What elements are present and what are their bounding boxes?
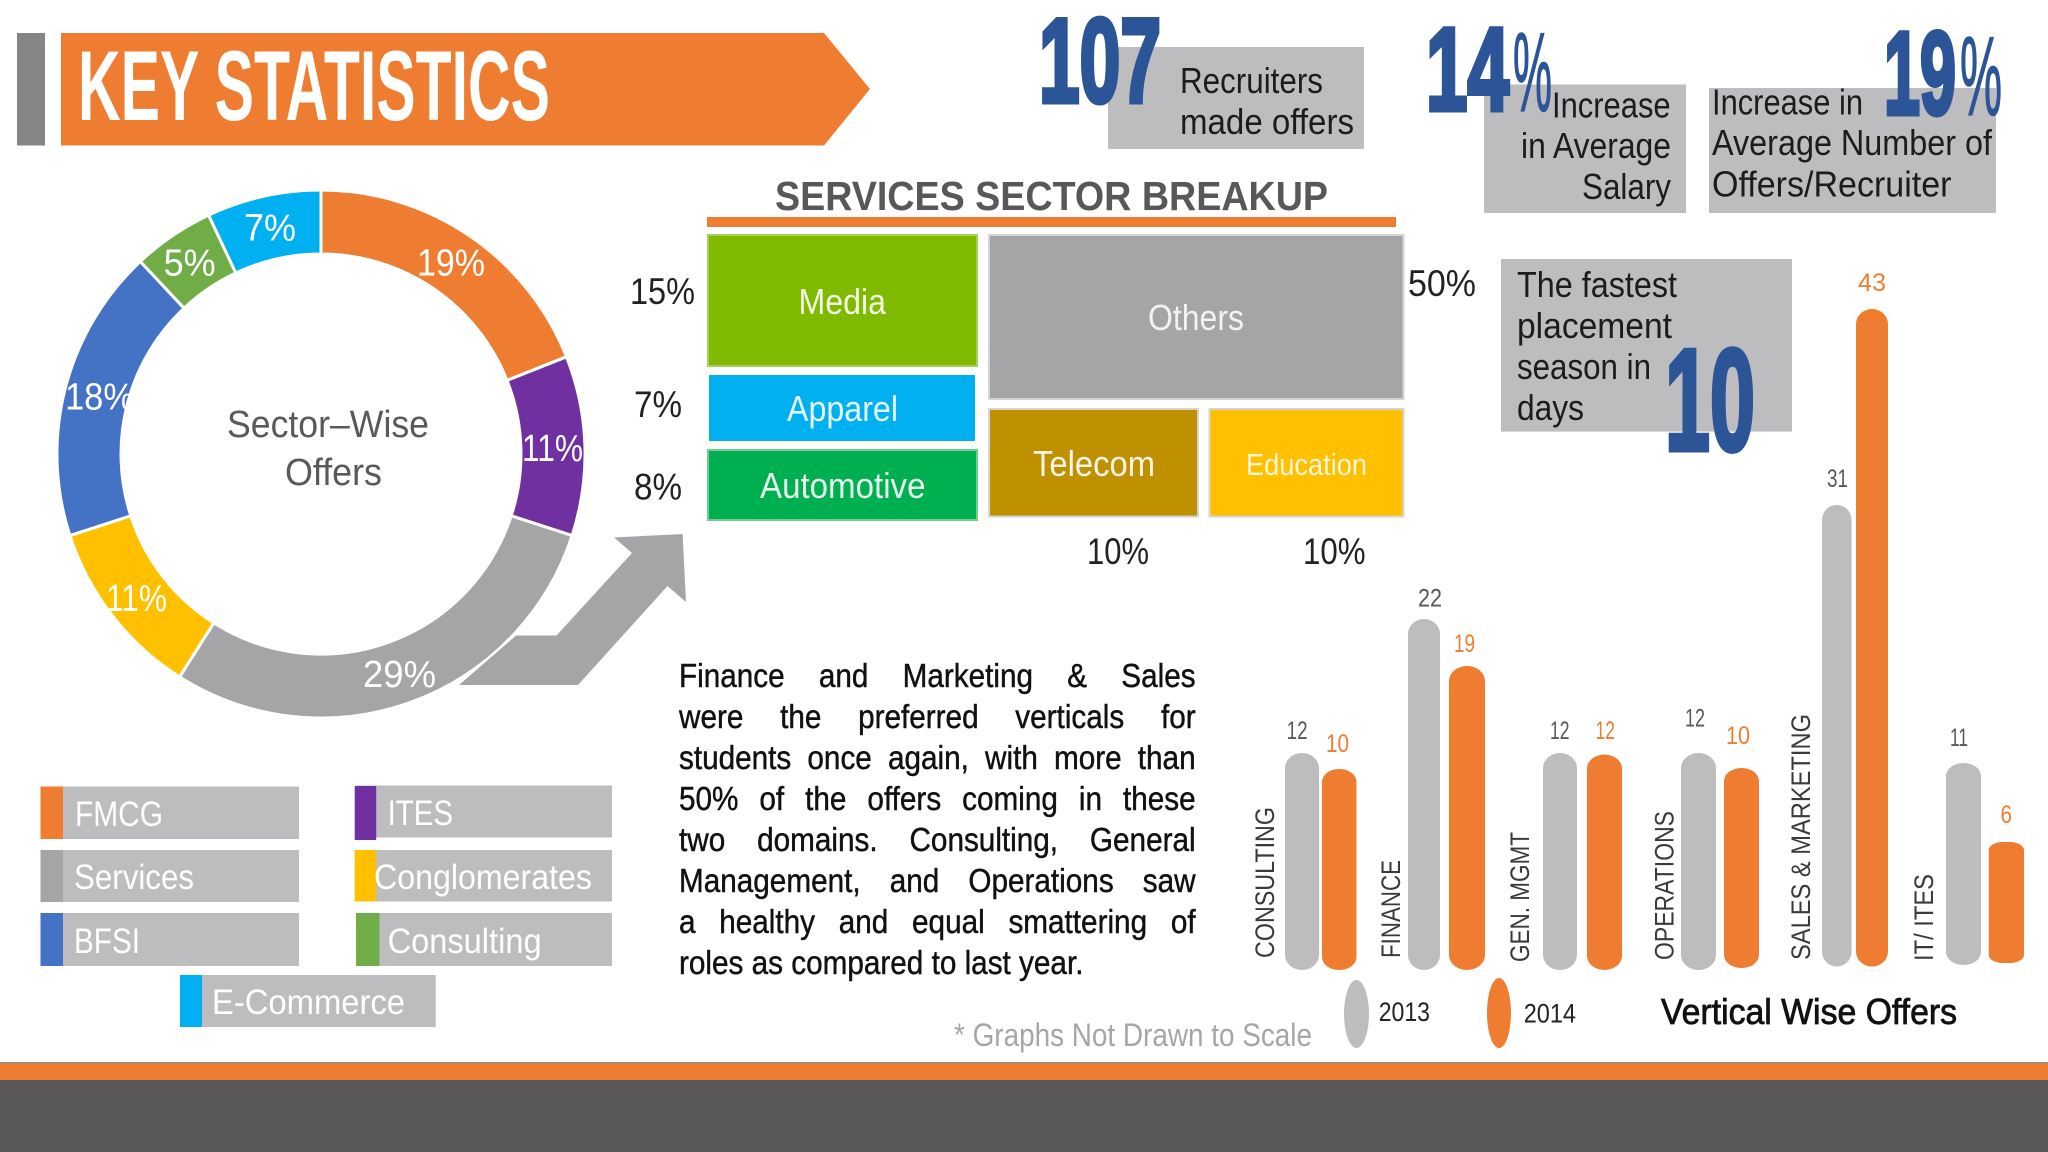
- commentary paragraph: [678, 657, 1196, 982]
- stat: 14% salary increase: [1426, 4, 1686, 213]
- treemap percentages: 7%: [634, 384, 682, 425]
- group: Finance: FINANCE: [1376, 860, 1406, 958]
- group: Sales and Marketing: [1786, 269, 1888, 966]
- group: General Management: 12: [1550, 717, 1570, 745]
- stat: 19% offers per recruiter: Increase in: [1712, 82, 1863, 123]
- stat: 14% salary increase: in Average: [1521, 125, 1671, 166]
- tile: Automotive: Automotive: [760, 465, 926, 506]
- group: General Management: 12: [1596, 717, 1615, 745]
- treemap: services sector breakup: [708, 235, 1404, 520]
- legend item: Services: [40, 850, 299, 902]
- stat: 14% salary increase: %: [1513, 10, 1552, 135]
- treemap percentages: 50%: [1408, 263, 1476, 304]
- donut percentages: 11%: [106, 578, 167, 620]
- stat: 19% offers per recruiter: [1709, 8, 2002, 213]
- treemap percentages: 8%: [634, 467, 682, 508]
- group: Finance: 19: [1454, 630, 1475, 658]
- tile: Media: Media: [798, 281, 887, 322]
- group: Finance: 22: [1418, 584, 1442, 612]
- tile: Others: Others: [1148, 297, 1244, 338]
- tile: Automotive: [708, 450, 977, 520]
- commentary paragraph: two domains. Consulting, General: [679, 821, 1196, 858]
- stat: fastest placement season 10 days: The fastest: [1517, 264, 1677, 305]
- donut percentages: 11%: [522, 428, 583, 470]
- stat: 107 recruiters: [1039, 0, 1364, 149]
- legend item: Services: Services: [74, 858, 194, 897]
- legend item: Conglomerates: Conglomerates: [374, 858, 592, 897]
- tile: Apparel: [709, 375, 975, 441]
- footnote: * Graphs Not Drawn to Scale: [954, 1017, 1312, 1053]
- group: IT / ITES: IT/ ITES: [1909, 874, 1939, 961]
- tile: Others: [989, 235, 1404, 399]
- commentary paragraph: 50% of the offers coming in these: [679, 780, 1196, 817]
- group: General Management: GEN. MGMT: [1505, 832, 1535, 962]
- group: IT / ITES: 11: [1950, 724, 1968, 752]
- legend item: Conglomerates: [355, 850, 612, 902]
- donut centre label: [227, 404, 429, 494]
- group: Consulting: [1250, 717, 1356, 970]
- stat: fastest placement season 10 days: season in: [1517, 346, 1651, 387]
- arrow: services to breakup: [459, 534, 686, 685]
- treemap percentages: [630, 263, 1476, 572]
- footer band: [0, 1062, 2048, 1152]
- group: General Management: [1505, 717, 1622, 970]
- donut percentages: 29%: [363, 654, 436, 696]
- group: IT / ITES: 6: [2000, 801, 2012, 829]
- group: Operations: 10: [1726, 722, 1750, 750]
- donut chart: sector-wise offers: [57, 190, 585, 718]
- tile: Media: [708, 235, 977, 366]
- heading: services sector breakup: SERVICES SECTOR BREAKUP: [775, 173, 1328, 219]
- group: Sales and Marketing: 31: [1827, 465, 1848, 493]
- legend: sectors: [40, 786, 612, 1027]
- commentary paragraph: students once again, with more than: [679, 739, 1196, 776]
- group: Finance: [1376, 584, 1485, 970]
- stat: fastest placement season 10 days: 10: [1665, 319, 1755, 481]
- donut percentages: 19%: [417, 242, 485, 284]
- group: IT / ITES: [1909, 724, 2024, 965]
- group: Sales and Marketing: SALES & MARKETING: [1786, 714, 1816, 960]
- stat: 107 recruiters: Recruiters: [1180, 60, 1323, 101]
- tile: Telecom: Telecom: [1033, 443, 1155, 484]
- stat: fastest placement season 10 days: [1501, 259, 1792, 481]
- tile: Apparel: Apparel: [787, 388, 898, 429]
- stat: 14% salary increase: Salary: [1582, 166, 1671, 207]
- legend item: Consulting: Consulting: [388, 922, 542, 961]
- legend item: E-Commerce: [180, 975, 436, 1027]
- legend item: FMCG: FMCG: [75, 795, 163, 834]
- stat: 14% salary increase: Increase: [1552, 85, 1671, 126]
- commentary paragraph: Management, and Operations saw: [679, 862, 1196, 899]
- commentary paragraph: were the preferred verticals for: [679, 698, 1196, 735]
- tile: Education: [1210, 409, 1404, 516]
- group: Consulting: 12: [1287, 717, 1308, 745]
- chart title: Vertical Wise Offers: [1661, 991, 1957, 1032]
- tile: Education: Education: [1246, 447, 1367, 482]
- legend item: FMCG: [40, 786, 299, 839]
- legend item: ITES: ITES: [388, 794, 453, 833]
- treemap percentages: 10%: [1303, 531, 1366, 572]
- group: Sales and Marketing: 43: [1858, 269, 1886, 297]
- legend item: E-Commerce: E-Commerce: [212, 983, 405, 1022]
- group: Consulting: CONSULTING: [1250, 807, 1280, 958]
- tile: Telecom: [989, 409, 1198, 516]
- legend item: BFSI: [40, 913, 299, 966]
- commentary paragraph: roles as compared to last year.: [679, 944, 1083, 981]
- legend item: Consulting: [356, 913, 612, 966]
- commentary paragraph: a healthy and equal smattering of: [679, 903, 1196, 940]
- stat: 14% salary increase: 14: [1426, 4, 1509, 136]
- bar chart: vertical wise offers: [1250, 269, 2024, 970]
- legend item: ITES: [355, 786, 612, 840]
- stat: 107 recruiters: made offers: [1180, 101, 1354, 142]
- donut percentages: 5%: [164, 242, 216, 284]
- donut percentages: 18%: [65, 377, 134, 419]
- group: Operations: OPERATIONS: [1650, 811, 1680, 960]
- stat: 19% offers per recruiter: 19: [1884, 8, 1956, 140]
- legend item: BFSI: BFSI: [74, 922, 140, 961]
- commentary paragraph: Finance and Marketing & Sales: [679, 657, 1196, 694]
- stat: 19% offers per recruiter: Average Number of: [1712, 122, 1993, 163]
- stat: fastest placement season 10 days: placement: [1517, 305, 1672, 346]
- donut percentages: [65, 208, 583, 696]
- chart legend: 2013 and 2014: 2014: [1524, 998, 1576, 1028]
- group: Consulting: 10: [1326, 730, 1349, 758]
- group: Operations: 12: [1685, 705, 1705, 733]
- donut centre label: Offers: [285, 452, 382, 494]
- stat: 19% offers per recruiter: Offers/Recruiter: [1712, 164, 1952, 204]
- stat: fastest placement season 10 days: days: [1517, 387, 1584, 428]
- group: Operations: [1650, 705, 1759, 970]
- treemap percentages: 10%: [1087, 531, 1149, 572]
- treemap percentages: 15%: [630, 271, 695, 312]
- title banner: KEY STATISTICS: [78, 30, 550, 141]
- chart legend: 2013 and 2014: 2013: [1379, 997, 1430, 1027]
- donut centre label: Sector–Wise: [227, 404, 429, 446]
- donut percentages: 7%: [244, 208, 296, 250]
- chart legend: 2013 and 2014: [1344, 978, 1576, 1048]
